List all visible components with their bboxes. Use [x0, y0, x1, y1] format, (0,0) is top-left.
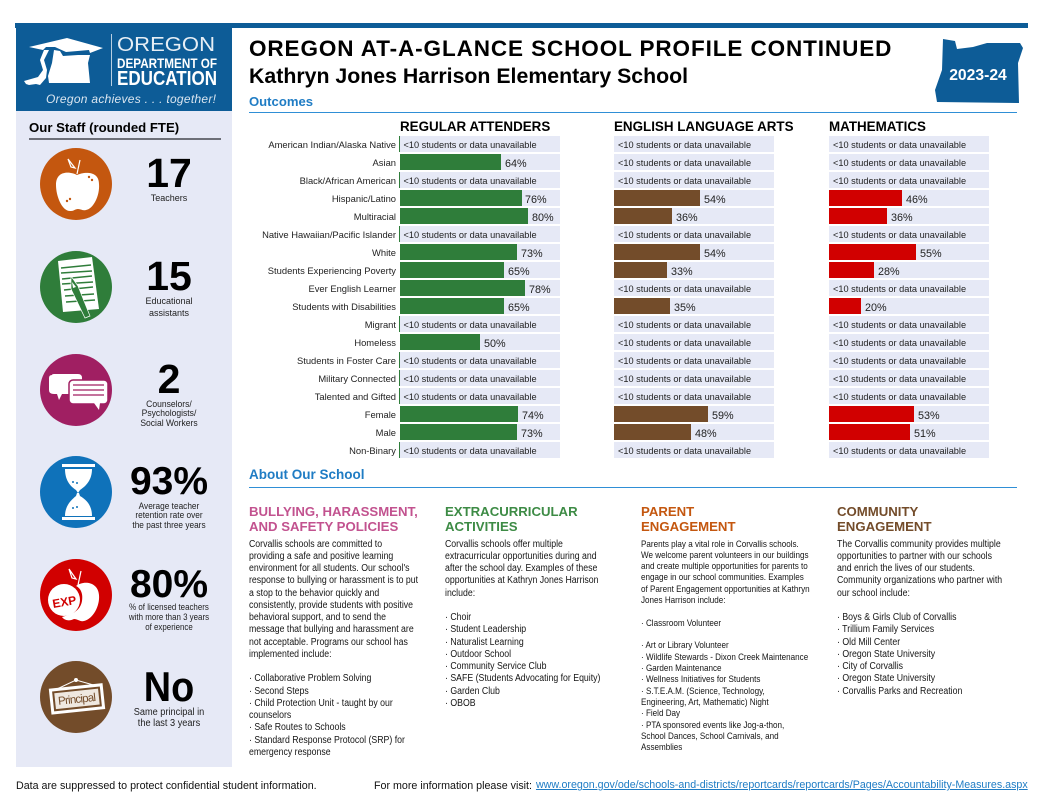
text: bullying policies	[249, 538, 418, 758]
bar chart: mathematics: <10 students or data unavailable	[833, 284, 966, 294]
bar chart: regular attenders: 76%	[525, 194, 547, 206]
heading: extracurricular activities: EXTRACURRICULAR	[445, 504, 578, 519]
student group labels: Talented and Gifted	[315, 391, 396, 402]
bar chart: regular attenders: <10 students or data unavailable	[404, 374, 537, 384]
student group labels: Black/African American	[300, 175, 396, 186]
text: extracurricular activities: opportunities at Kathryn Jones Harrison	[445, 575, 599, 586]
icon: hourglass	[40, 456, 112, 528]
text: bullying policies: environment for all students. Our school's	[249, 563, 410, 574]
student group labels	[262, 139, 396, 456]
bar chart: mathematics: <10 students or data unavailable	[833, 356, 966, 366]
text: bullying policies: implemented include:	[249, 649, 332, 660]
text: bullying policies: · Safe Routes to Schools	[249, 722, 346, 733]
heading: extracurricular activities	[445, 504, 578, 534]
heading: parent engagement	[641, 504, 736, 534]
bar chart: mathematics: 28%	[878, 266, 900, 278]
text: parent engagement: engage in our school communities. Examples	[641, 572, 804, 582]
footer link text: For more information please visit: www.oregon.gov/ode/schools-and-districts/reportcards/reportcards/Pages/Accountability-Measures.aspx	[374, 779, 1028, 792]
text: community engagement: · Old Mill Center	[837, 637, 900, 648]
text: community engagement: opportunities to partner with our schools	[837, 551, 992, 562]
stat: educational assistants: 15	[146, 253, 192, 299]
bar chart: mathematics: <10 students or data unavailable	[833, 338, 966, 348]
bar chart: regular attenders: <10 students or data unavailable	[404, 176, 537, 186]
bar chart: english language arts: <10 students or data unavailable	[618, 392, 751, 402]
bar chart: mathematics: <10 students or data unavailable	[833, 158, 966, 168]
bar chart: mathematics: 20%	[865, 302, 887, 314]
caption: experienced teachers	[128, 602, 209, 632]
text: community engagement: · City of Corvallis	[837, 661, 903, 672]
logo: Oregon Department of Education: Oregon achieves . . . together!	[46, 92, 217, 106]
text: parent engagement: Engineering, Art, Mathematic) Night	[641, 697, 769, 707]
caption: teacher retention: the past three years	[132, 520, 206, 530]
caption: teacher retention: Average teacher	[139, 500, 199, 510]
text: bullying policies: · Second Steps	[249, 686, 309, 697]
bar chart: english language arts: 48%	[695, 428, 717, 440]
bar chart: mathematics: 55%	[920, 248, 942, 260]
caption: same principal: the last 3 years	[138, 718, 200, 729]
text: community engagement: · Corvallis Parks and Recreation	[837, 686, 962, 697]
text: parent engagement: · PTA sponsored events like Jog-a-thon,	[641, 720, 784, 730]
heading: mathematics: MATHEMATICS	[829, 119, 926, 134]
bar chart: english language arts: 35%	[674, 302, 696, 314]
caption: experienced teachers: % of licensed teachers	[129, 602, 209, 612]
student group labels: Students with Disabilities	[292, 301, 396, 312]
text: community engagement	[837, 538, 1002, 697]
heading: community engagement: ENGAGEMENT	[837, 519, 932, 534]
text: parent engagement: · Classroom Volunteer	[641, 618, 721, 628]
text: extracurricular activities: · Choir	[445, 612, 471, 623]
icon: speech bubbles	[40, 354, 112, 426]
subtitle: Kathryn Jones Harrison Elementary School	[249, 64, 688, 88]
text: bullying policies: behavioral support, and to send the	[249, 612, 386, 623]
student group labels: Male	[376, 427, 396, 438]
text: parent engagement: Assemblies	[641, 742, 682, 752]
student group labels: Military Connected	[318, 373, 396, 384]
text: parent engagement: and create multiple opportunities for parents to	[641, 561, 808, 571]
bar chart: mathematics: <10 students or data unavailable	[833, 230, 966, 240]
bar chart: mathematics: <10 students or data unavailable	[833, 140, 966, 150]
bar chart: english language arts: <10 students or data unavailable	[618, 320, 751, 330]
bar chart: mathematics: <10 students or data unavailable	[833, 446, 966, 456]
bar chart: english language arts: 59%	[712, 410, 734, 422]
heading: parent engagement: ENGAGEMENT	[641, 519, 736, 534]
bar chart: mathematics: 36%	[891, 212, 913, 224]
caption: counselors: Counselors/	[146, 398, 192, 408]
text: parent engagement: · Garden Maintenance	[641, 663, 721, 673]
text: extracurricular activities: extracurricular opportunities during and	[445, 551, 597, 562]
text: parent engagement: We welcome parent volunteers in our buildings	[641, 550, 809, 560]
text: extracurricular activities	[445, 538, 600, 709]
text: extracurricular activities: · OBOB	[445, 698, 476, 709]
student group labels: White	[372, 247, 396, 258]
text: community engagement: · Oregon State University	[837, 649, 935, 660]
bar chart: regular attenders: 65%	[508, 266, 530, 278]
caption: teacher retention	[132, 500, 206, 530]
text: bullying policies: a stop to the behavior quickly and	[249, 588, 379, 599]
student group labels: Multiracial	[354, 211, 396, 222]
text: community engagement: · Oregon State University	[837, 673, 935, 684]
text: extracurricular activities: · Naturalist Learning	[445, 637, 524, 648]
heading: regular attenders: REGULAR ATTENDERS	[400, 119, 550, 134]
bar chart: regular attenders: 50%	[484, 338, 506, 350]
text: parent engagement: · Art or Library Volunteer	[641, 640, 729, 650]
bar chart: english language arts	[614, 136, 774, 458]
logo: Oregon Department of Education: EDUCATION	[117, 68, 217, 90]
bar chart: mathematics: 53%	[918, 410, 940, 422]
bar chart: regular attenders: 80%	[532, 212, 554, 224]
heading: bullying policies: BULLYING, HARASSMENT,	[249, 504, 418, 519]
icon: apple	[40, 148, 112, 220]
bar chart: english language arts: <10 students or data unavailable	[618, 338, 751, 348]
bar chart: regular attenders: <10 students or data unavailable	[404, 446, 537, 456]
text: extracurricular activities: · Garden Club	[445, 686, 500, 697]
caption: educational assistants: assistants	[149, 308, 189, 318]
bar chart: regular attenders: 73%	[521, 248, 543, 260]
student group labels: Hispanic/Latino	[332, 193, 396, 204]
text: parent engagement: · S.T.E.A.M. (Science, Technology,	[641, 686, 765, 696]
text: parent engagement	[641, 538, 810, 752]
stat: same principal: No	[144, 663, 194, 710]
bar chart: english language arts: 54%	[704, 248, 726, 260]
icon: document and pencil	[40, 251, 112, 323]
icon: principal sign	[40, 661, 112, 733]
text: bullying policies: emergency response	[249, 747, 331, 758]
student group labels: Migrant	[365, 319, 396, 330]
bar chart: english language arts: <10 students or data unavailable	[618, 140, 751, 150]
text: community engagement: and enrich the lives of our students.	[837, 563, 975, 574]
bar chart: english language arts: <10 students or data unavailable	[618, 284, 751, 294]
footnote: Data are suppressed to protect confidential student information.	[16, 780, 317, 792]
text: parent engagement: School Dances, School Carnivals, and	[641, 731, 779, 741]
year badge: Oregon shape: 2023-24	[949, 67, 1007, 84]
student group labels: Students Experiencing Poverty	[268, 265, 396, 276]
section heading: about our school: About Our School	[249, 467, 364, 482]
stat: experienced teachers: 80%	[130, 563, 208, 606]
student group labels: Asian	[373, 157, 396, 168]
heading: community engagement: COMMUNITY	[837, 504, 918, 519]
top bar	[15, 23, 1028, 28]
bar chart: english language arts: 54%	[704, 194, 726, 206]
bar chart: regular attenders: <10 students or data unavailable	[404, 230, 537, 240]
title: OREGON AT-A-GLANCE SCHOOL PROFILE CONTINUED	[249, 36, 892, 61]
bar chart: english language arts: <10 students or data unavailable	[618, 158, 751, 168]
heading: community engagement	[837, 504, 932, 534]
text: extracurricular activities: · Outdoor School	[445, 649, 511, 660]
text: parent engagement: · Field Day	[641, 708, 680, 718]
sidebar panel	[16, 111, 232, 767]
section heading: outcomes: Outcomes	[249, 94, 313, 109]
caption: counselors	[140, 398, 198, 428]
bar chart: regular attenders: <10 students or data unavailable	[404, 140, 537, 150]
stat: teachers: 17	[146, 150, 192, 196]
caption: teachers: Teachers	[151, 193, 187, 203]
text: extracurricular activities: · Community Service Club	[445, 661, 547, 672]
bar chart: regular attenders: 64%	[505, 158, 527, 170]
student group labels: Native Hawaiian/Pacific Islander	[262, 229, 396, 240]
caption: educational assistants: Educational	[145, 296, 193, 306]
bar chart: regular attenders: 65%	[508, 302, 530, 314]
caption: experienced teachers: with more than 3 years	[129, 612, 209, 622]
bar chart: english language arts: <10 students or data unavailable	[618, 374, 751, 384]
bar chart: english language arts: <10 students or data unavailable	[618, 356, 751, 366]
logo: Oregon Department of Education: OREGON	[117, 34, 215, 56]
text: bullying policies: providing a safe and positive learning	[249, 551, 393, 562]
text: community engagement: · Boys & Girls Club of Corvallis	[837, 612, 956, 623]
text: community engagement: · Trillium Family Services	[837, 624, 934, 635]
caption: same principal	[134, 706, 204, 729]
bar chart: regular attenders: 73%	[521, 428, 543, 440]
bar chart: regular attenders: 74%	[522, 410, 544, 422]
text: extracurricular activities: · Student Leadership	[445, 624, 526, 635]
student group labels: American Indian/Alaska Native	[268, 139, 396, 150]
text: bullying policies: · Standard Response Protocol (SRP) for	[249, 735, 405, 746]
student group labels: Homeless	[354, 337, 396, 348]
text: parent engagement: · Wellness Initiatives for Students	[641, 674, 760, 684]
bar chart: mathematics: <10 students or data unavailable	[833, 374, 966, 384]
bar chart: mathematics: <10 students or data unavailable	[833, 320, 966, 330]
heading: extracurricular activities: ACTIVITIES	[445, 519, 518, 534]
stat: teacher retention: 93%	[130, 460, 208, 503]
text: bullying policies: consistently, provide students with positive	[249, 600, 413, 611]
text: bullying policies: counselors	[249, 710, 291, 721]
text: bullying policies: response to bullying or harassment is to put	[249, 575, 418, 586]
text: community engagement: Community organizations who partner with	[837, 575, 1002, 586]
student group labels: Ever English Learner	[308, 283, 396, 294]
heading: english language arts: ENGLISH LANGUAGE ARTS	[614, 119, 794, 134]
bar chart: english language arts: <10 students or data unavailable	[618, 176, 751, 186]
text: bullying policies: Corvallis schools are committed to	[249, 538, 382, 550]
bar chart: regular attenders: <10 students or data unavailable	[404, 392, 537, 402]
icon: apple with EXP bite: EXP	[51, 593, 77, 611]
bar chart: mathematics: <10 students or data unavailable	[833, 392, 966, 402]
text: community engagement: The Corvallis community provides multiple	[837, 538, 1001, 550]
text: extracurricular activities: · SAFE (Students Advocating for Equity)	[445, 673, 600, 684]
bar chart: mathematics	[829, 136, 989, 458]
stat: counselors: 2	[158, 356, 180, 402]
text: community engagement: our school include:	[837, 588, 910, 599]
text: bullying policies: not acceptable. Programs our school has	[249, 637, 408, 648]
caption: educational assistants	[145, 296, 193, 318]
text: bullying policies: · Child Protection Unit - taught by our	[249, 698, 393, 709]
heading: bullying policies	[249, 504, 418, 534]
bar chart: english language arts: <10 students or data unavailable	[618, 446, 751, 456]
bar chart: regular attenders	[399, 136, 560, 458]
year badge: Oregon shape	[935, 39, 1023, 103]
bar chart: mathematics: <10 students or data unavailable	[833, 176, 966, 186]
bar chart: english language arts: <10 students or data unavailable	[618, 230, 751, 240]
bar chart: english language arts: 36%	[676, 212, 698, 224]
text: extracurricular activities: include:	[445, 588, 475, 599]
bar chart: regular attenders: <10 students or data unavailable	[404, 320, 537, 330]
text: parent engagement: · Wildlife Stewards - Dixon Creek Maintenance	[641, 652, 808, 662]
bar chart: mathematics: 46%	[906, 194, 928, 206]
icon: apple with EXP bite	[40, 559, 112, 631]
student group labels: Female	[365, 409, 396, 420]
text: extracurricular activities: Corvallis schools offer multiple	[445, 538, 563, 550]
text: extracurricular activities: after the school day. Examples of these	[445, 563, 597, 574]
sidebar heading: Our Staff (rounded FTE)	[29, 120, 179, 135]
caption: counselors: Psychologists/	[142, 408, 196, 418]
text: bullying policies: message that bullying and harassment are	[249, 624, 414, 635]
bar chart: regular attenders: 78%	[529, 284, 551, 296]
caption: counselors: Social Workers	[140, 418, 198, 428]
heading: parent engagement: PARENT	[641, 504, 694, 519]
logo: Oregon Department of Education	[16, 28, 232, 111]
heading: bullying policies: AND SAFETY POLICIES	[249, 519, 398, 534]
caption: same principal: Same principal in	[134, 706, 204, 718]
bar chart: english language arts: 33%	[671, 266, 693, 278]
student group labels: Students in Foster Care	[297, 355, 396, 366]
bar chart: regular attenders: <10 students or data unavailable	[404, 356, 537, 366]
text: parent engagement: Parents play a vital role in Corvallis schools.	[641, 538, 799, 548]
icon: principal sign: Principal	[58, 692, 97, 708]
text: parent engagement: of Parent Engagement opportunities at Kathryn	[641, 584, 810, 594]
text: bullying policies: · Collaborative Problem Solving	[249, 673, 371, 684]
text: parent engagement: Jones Harrison include:	[641, 595, 726, 605]
student group labels: Non-Binary	[349, 445, 396, 456]
bar chart: mathematics: 51%	[914, 428, 936, 440]
caption: experienced teachers: of experience	[145, 622, 193, 632]
caption: teacher retention: retention rate over	[135, 510, 203, 520]
